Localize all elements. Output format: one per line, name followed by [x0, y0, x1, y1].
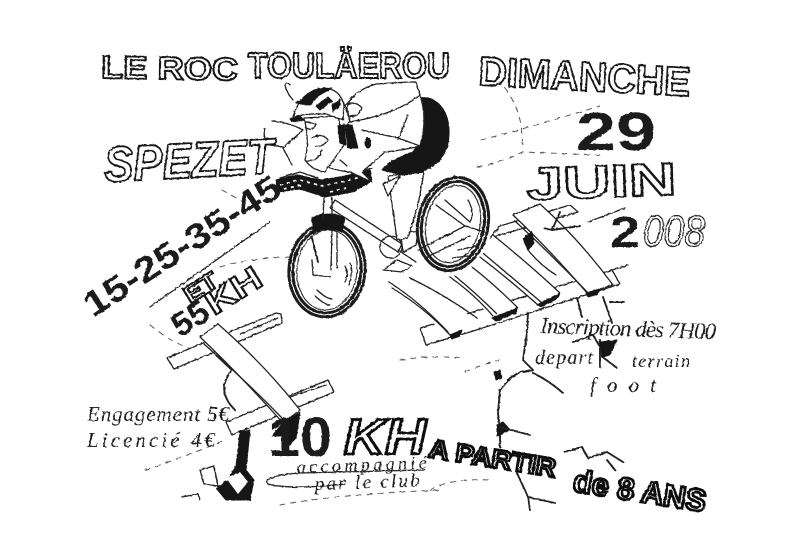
accompanied label: accompagnié: [296, 452, 428, 477]
accompanied underline: [267, 470, 425, 487]
date: Juin: JUIN: [526, 153, 677, 210]
date: 2008: [610, 207, 705, 257]
plank 2: [480, 235, 560, 305]
plank 4: [392, 278, 477, 337]
ET label: ET: [179, 267, 224, 309]
plant tuft: [182, 430, 254, 500]
entry fee: Engagement 5€: [86, 402, 230, 426]
head and face: [264, 116, 347, 172]
cyclist and bike: [264, 82, 495, 319]
distance 55 km: [164, 259, 269, 344]
registration time: Inscription dès 7H00: [539, 313, 717, 344]
right plank bridge: [389, 204, 628, 345]
departure label: depart: [535, 347, 593, 369]
debris under planks: [523, 232, 534, 250]
front wheel: [286, 221, 368, 319]
age 8 years: de 8 ANS: [571, 463, 709, 519]
helmet: [285, 83, 344, 122]
year last digits: 008: [643, 207, 705, 256]
handlebar and hands: [276, 168, 400, 197]
underline for distances: [150, 222, 270, 307]
unit KM: KH: [344, 409, 427, 465]
ground cracks: [216, 212, 624, 510]
from age: A PARTIR: [427, 433, 558, 483]
left bridge lower beam: [226, 380, 334, 435]
backpack black: [382, 98, 449, 175]
rider leg: [388, 172, 424, 240]
unit KH: KH: [198, 259, 269, 322]
terrain label: terrain: [632, 351, 690, 371]
distances: 15-25-35-45: [76, 168, 289, 325]
torso and rucksack top: [318, 82, 424, 182]
left bridge upper beam: [167, 313, 282, 369]
left bridge: two beams and a diagonal board: [167, 313, 334, 452]
bike frame: [312, 198, 418, 272]
plank shadows: [450, 289, 600, 339]
left bridge board: [200, 324, 300, 423]
title: LE ROC: LE ROC: [101, 49, 238, 87]
plank 3: [450, 267, 518, 318]
year first digit: 2: [610, 208, 640, 257]
licensed fee: Licencié 4€: [86, 428, 216, 452]
title: Toulaëroù: TOULÄEROU: [248, 45, 450, 86]
background terrain: faint dashed path marks: [145, 88, 600, 505]
rear wheel: [411, 173, 495, 275]
by the club label: par le club: [312, 470, 420, 495]
foot label: foot: [590, 373, 657, 397]
right bridge beams: [420, 270, 620, 345]
title: Dimanche: DIMANCHE: [478, 48, 692, 105]
plank 1: [513, 204, 613, 293]
number 10: 10: [268, 405, 332, 468]
number 55: 55: [164, 292, 216, 344]
date: 29: 29: [576, 102, 656, 162]
town name: Spezet: SPEZET: [103, 128, 279, 193]
